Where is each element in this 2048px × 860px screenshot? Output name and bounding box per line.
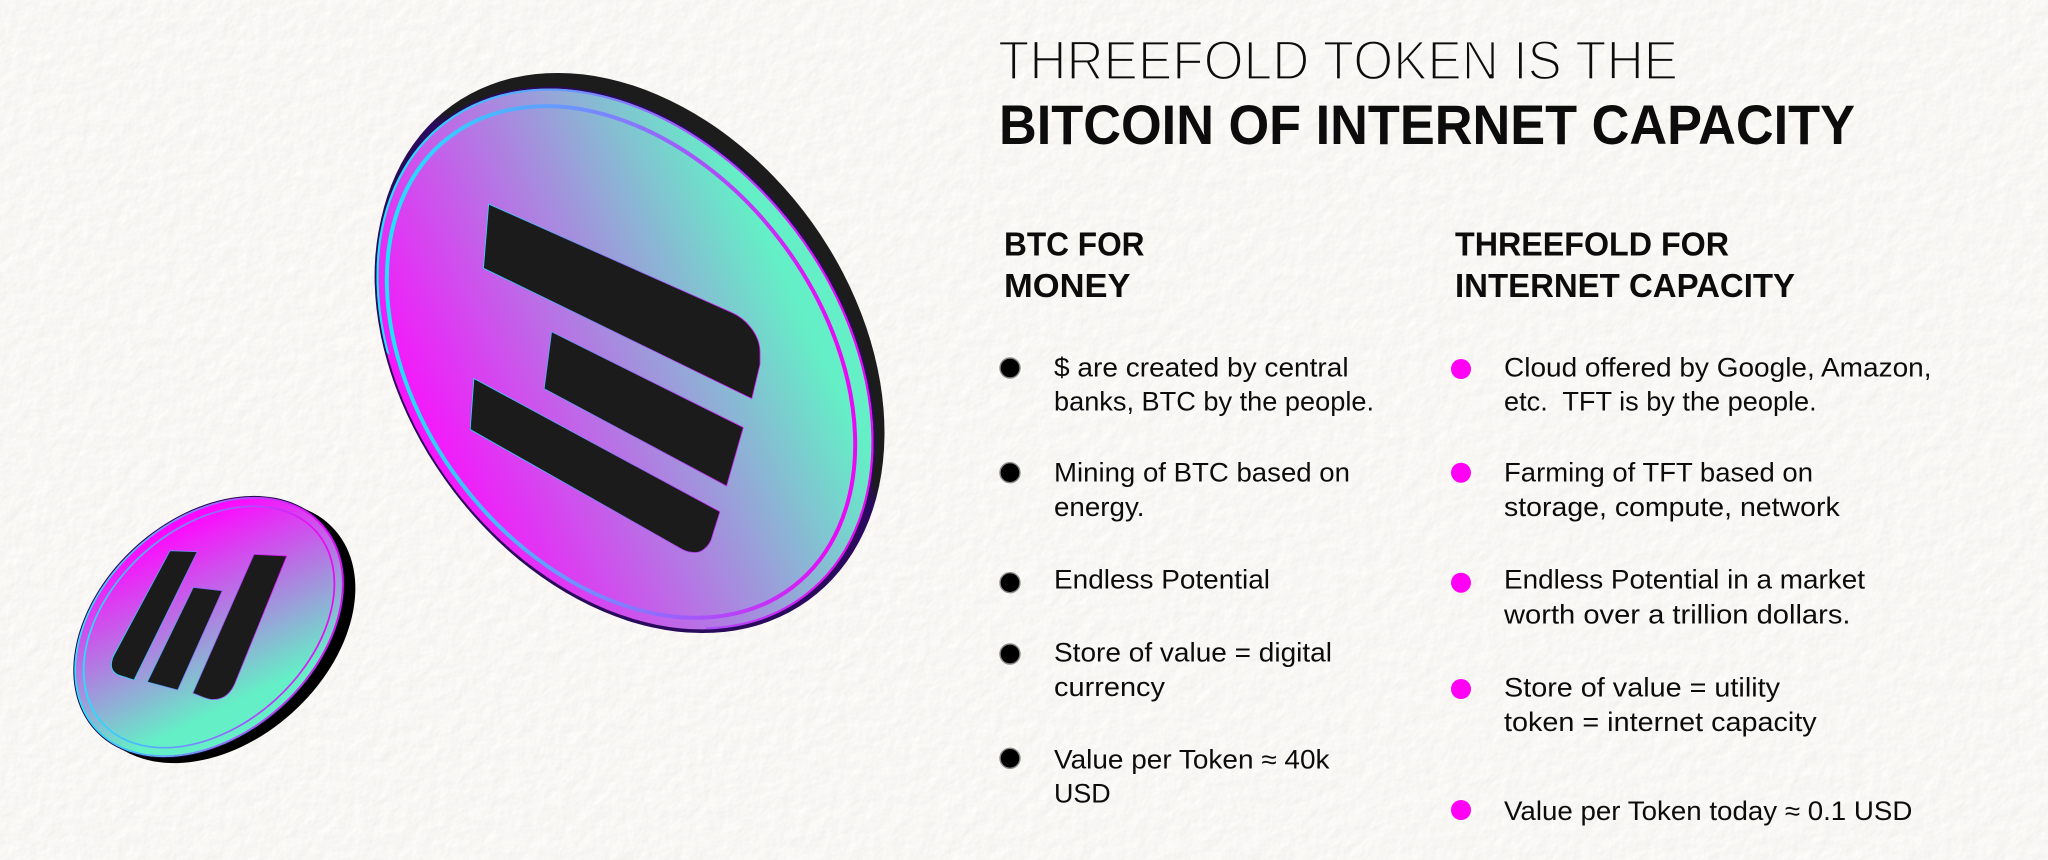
- bullet: farming of TFT: storage, compute, network: [1504, 492, 1840, 522]
- bullet: value per token: Value per Token ≈ 40k: [1054, 744, 1330, 774]
- heading: ThreeFold for internet capacity: INTERNET CAPACITY: [1455, 267, 1795, 304]
- bullet: farming of TFT: Farming of TFT based on: [1504, 458, 1813, 488]
- bullet: store of value: currency: [1054, 672, 1166, 702]
- bullet: store of value: Store of value = digital: [1054, 637, 1332, 667]
- bullet: mining on energy: Mining of BTC based on: [1054, 458, 1350, 488]
- bullet: mining on energy: energy.: [1054, 492, 1144, 522]
- bullet: utility token: Store of value = utility: [1504, 673, 1781, 703]
- heading: BTC for money: [1004, 225, 1145, 304]
- bullet: created by the people: [1000, 353, 1374, 417]
- icon: small coin logo bars: [111, 551, 287, 700]
- bullet: value per token today: Value per Token today ≈ 0.1 USD: [1504, 796, 1912, 826]
- bullet: cloud by the people: [1451, 353, 1932, 417]
- bullet: store of value: [1000, 637, 1332, 702]
- bullet: utility token: token = internet capacity: [1504, 707, 1818, 737]
- bullet: endless potential market: [1451, 564, 1866, 630]
- bullet: endless potential: Endless Potential: [1054, 564, 1270, 594]
- bullet: created by the people: $ are created by central: [1054, 353, 1349, 383]
- bullet: utility token: [1451, 673, 1818, 737]
- title: [998, 28, 1855, 156]
- bullet: cloud by the people: Cloud offered by Google, Amazon,: [1504, 353, 1932, 383]
- bullet: created by the people: banks, BTC by the people.: [1054, 387, 1374, 417]
- icon: large coin logo bars: [470, 204, 760, 553]
- bullet: endless potential market: worth over a trillion dollars.: [1503, 600, 1850, 630]
- bullet: endless potential market: Endless Potential in a market: [1504, 564, 1866, 594]
- panel: BTC for money: [1000, 225, 1374, 809]
- icon: small ThreeFold coin: [22, 443, 407, 816]
- title: BITCOIN OF INTERNET CAPACITY: [999, 93, 1855, 156]
- panel: ThreeFold for internet capacity: [1451, 225, 1932, 826]
- icon: large ThreeFold coin: [374, 73, 884, 633]
- bullet: value per token: [1000, 744, 1330, 809]
- bullet: value per token: USD: [1054, 779, 1111, 809]
- bullet: mining on energy: [1000, 458, 1350, 522]
- bullet: farming of TFT: [1451, 458, 1840, 522]
- heading: ThreeFold for internet capacity: THREEFOLD FOR: [1455, 225, 1729, 262]
- heading: BTC for money: BTC FOR: [1004, 225, 1145, 262]
- title: THREEFOLD TOKEN IS THE: [998, 28, 1678, 91]
- heading: ThreeFold for internet capacity: [1455, 225, 1795, 304]
- heading: BTC for money: MONEY: [1004, 267, 1130, 304]
- bullet: cloud by the people: etc. TFT is by the people.: [1504, 387, 1817, 417]
